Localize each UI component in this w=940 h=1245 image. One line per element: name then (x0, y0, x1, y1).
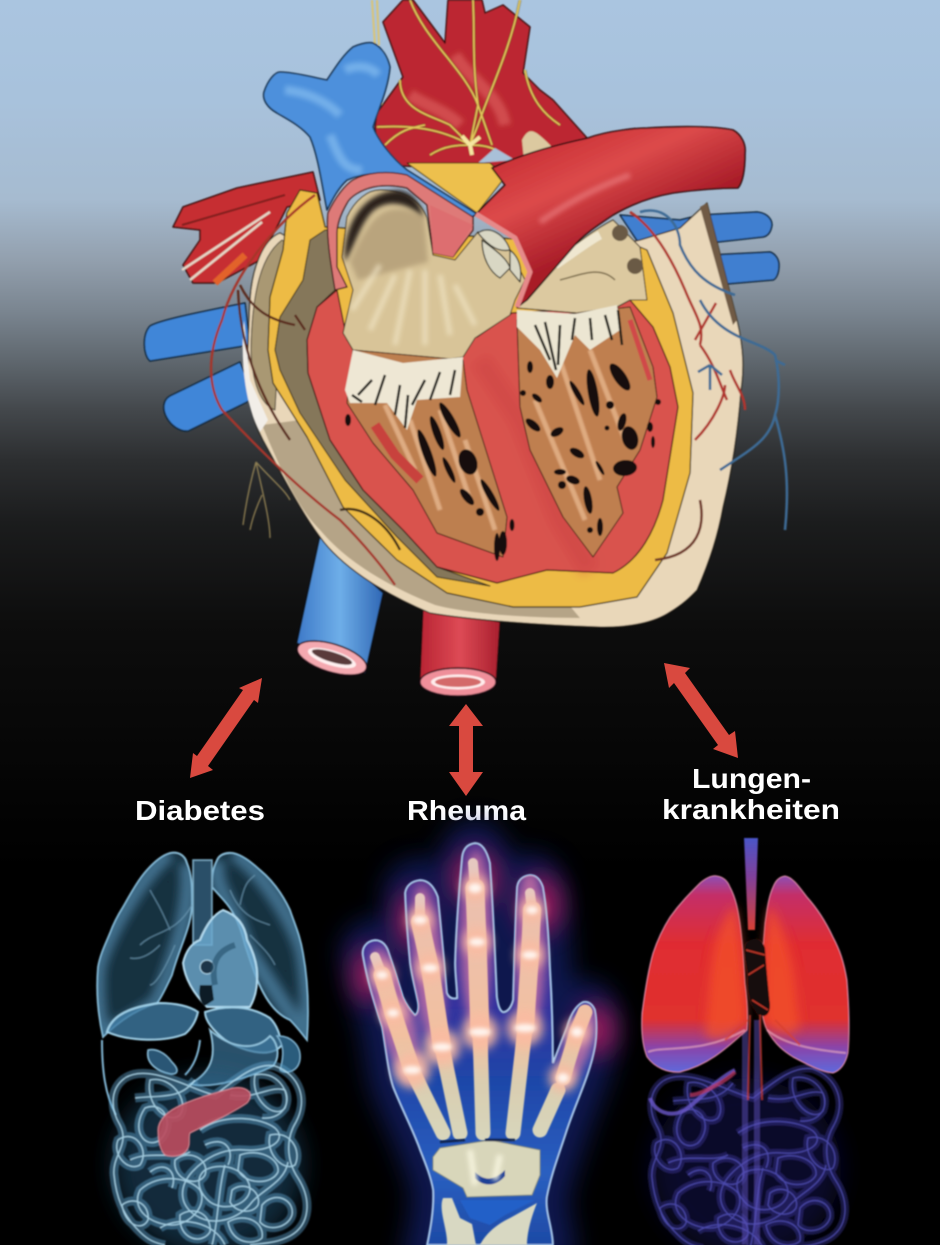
bottom aorta with opening (420, 610, 500, 696)
pancreas (158, 1088, 250, 1156)
hand with inflamed joints (Rheuma) (352, 843, 616, 1245)
aortic valve (478, 230, 521, 282)
double arrow: Lungenkrankheiten (664, 663, 738, 758)
chordae, left ventricle (517, 305, 622, 378)
fatty patch behind arteries (407, 163, 505, 213)
heart (183, 910, 257, 1007)
myocardium red wall (307, 290, 678, 583)
superior vena cava, blue (264, 43, 477, 218)
gallbladder lobe (148, 1050, 177, 1074)
lungs (97, 852, 308, 1040)
label: Diabetes: Diabetes (135, 795, 265, 826)
double arrow: Rheuma (449, 704, 483, 796)
right lung (761, 876, 849, 1073)
pericardium outer layer (243, 203, 743, 627)
spleen (277, 1036, 300, 1072)
right atrium chamber (342, 190, 525, 365)
olive connective tissue (275, 230, 490, 586)
double arrow: Diabetes (190, 678, 262, 778)
bottom vena cava with opening (293, 537, 383, 682)
finger bones (375, 863, 585, 1133)
forearm bones (442, 1198, 537, 1245)
heart illustration (144, 0, 787, 696)
diaphragm and liver (107, 1003, 282, 1053)
intestines (113, 1065, 307, 1245)
chordae, right ventricle (345, 350, 463, 430)
bronchi (130, 875, 275, 985)
left pulmonary vessels (173, 172, 320, 283)
left atrium chamber (517, 220, 647, 313)
lung edge glow (97, 853, 308, 1040)
trachea (744, 838, 758, 930)
stomach (190, 1030, 278, 1085)
liver outline (102, 1040, 200, 1115)
blue veins, left (144, 303, 255, 431)
yellow fat layer (268, 190, 693, 607)
dark heart space (745, 939, 770, 1016)
blue halo (363, 843, 596, 1245)
blue veins, right (620, 212, 779, 285)
nerve strands at top (372, 0, 382, 105)
trachea (193, 860, 212, 945)
torso with red lungs (Lungenkrankheiten) (642, 838, 849, 1245)
nerve branches left (243, 462, 290, 538)
hand silhouette (363, 843, 596, 1245)
pink halos (352, 850, 616, 1056)
coronary vessels right (630, 211, 787, 560)
label: Lungenkrankheiten: Lungen- (692, 763, 811, 794)
wrist carpal bones (433, 1140, 540, 1197)
label: Lungenkrankheiten: krankheiten (662, 794, 840, 825)
torso with pancreas (Diabetes) (97, 852, 308, 1245)
coronary vessels left (211, 195, 400, 585)
swollen joints (370, 875, 590, 1092)
left lung (642, 876, 748, 1072)
intestines, violet (651, 1068, 845, 1245)
label: Rheuma: Rheuma (407, 795, 526, 826)
stomach strand (650, 1070, 735, 1114)
pulmonary artery wall, pink (327, 173, 473, 290)
spine vessels (745, 1020, 757, 1245)
aorta arch (475, 127, 745, 307)
right ventricle trabeculae (345, 350, 514, 561)
pink flesh in fingers (359, 850, 605, 1087)
left ventricle trabeculae (517, 307, 661, 557)
upper great vessels (375, 0, 587, 170)
hilum strands (725, 1015, 800, 1100)
